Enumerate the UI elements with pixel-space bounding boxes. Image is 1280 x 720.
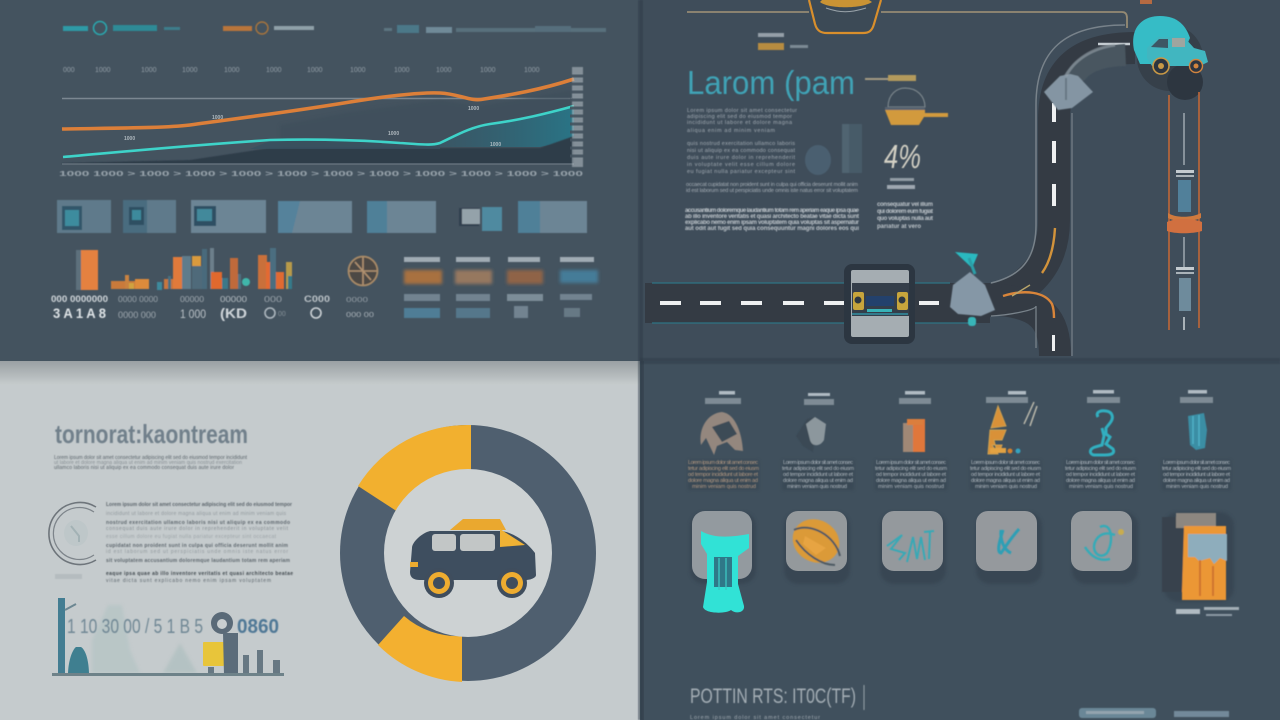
footer heading: POTTIN RTS: IT0C(TF): [690, 685, 856, 708]
description text columns: dolore magna aliqua ut enim ad: [1163, 478, 1230, 484]
road: horizontal and curve: [645, 25, 1135, 356]
card row: [57, 200, 587, 233]
paragraph: esse cillum dolore eu fugiat nulla pariatur excepteur sint occaecat: [106, 534, 277, 540]
line chart: orange and teal trends: [59, 67, 585, 178]
description text columns: tetur adipiscing elit sed do eiusm: [1065, 466, 1136, 472]
donut chart: yellow and slate: [340, 425, 596, 682]
icon: car: [410, 519, 536, 598]
tile row: rounded tiles: [690, 511, 1234, 602]
body text block: occaecat cupidatat non proident sunt in culpa qui officia deserunt mollit anim: [686, 182, 858, 188]
paragraph: id est laborum sed ut perspiciatis unde omnis iste natus error: [106, 549, 288, 555]
body text block: aliqua enim ad minim veniam: [687, 128, 775, 134]
description text columns: tetur adipiscing elit sed do eiusm: [875, 466, 947, 472]
panel: top-left dashboard: [0, 0, 640, 361]
icon: teal tile figure: [701, 531, 749, 613]
bar chart labels: 0000 0000: [118, 295, 159, 304]
line chart: orange and teal trends: 1000 1000 > 1000 > 1000 > 1000 > 1000 > 1000 > 1000 > 1000 > 1000 > 1000 > 1000: [59, 171, 583, 178]
paragraph: [106, 502, 293, 584]
description text columns: minim veniam quis nostrud: [787, 484, 847, 490]
line chart: orange and teal trends: 1000: [124, 136, 135, 142]
icons row: [700, 402, 1207, 455]
line chart: orange and teal trends: 1000: [436, 67, 452, 74]
description text columns: od tempor incididunt ut labore et: [971, 472, 1040, 478]
icon: teal and grey marker: [950, 252, 995, 326]
footer tags: [1079, 708, 1229, 718]
bar chart labels: 000 00: [346, 312, 374, 319]
line chart: orange and teal trends: 1000: [524, 67, 540, 74]
heading: Larom (pam: [687, 64, 855, 101]
subheading text: ut labore et dolore magna aliqua ut enim ad minim veniam quis nostrud exercitation: [54, 460, 242, 466]
body text block: adipiscing elit sed do eiusmod tempor: [687, 114, 792, 120]
description text columns: dolore magna aliqua ut enim ad: [1066, 478, 1135, 484]
bar chart labels: 0000 000: [118, 310, 156, 320]
paragraph: incididunt ut labore et dolore magna aliqua ut enim ad minim veniam quis: [106, 511, 286, 517]
banner caption: [1176, 607, 1239, 616]
description text columns: Lorem ipsum dolor sit amet consec: [783, 460, 853, 466]
skyline illustration with stat: [52, 598, 284, 676]
faint chart icon: [805, 124, 862, 175]
right bridge road: [1167, 92, 1202, 330]
description text columns: minim veniam quis nostrud: [878, 484, 944, 490]
bar chart labels: 00000: [220, 295, 248, 304]
paragraph: eaque ipsa quae ab illo inventore veritatis et quasi architecto beatae: [106, 571, 293, 577]
stat note: pariatur at vero: [877, 224, 921, 230]
bar chart labels: 1 000: [180, 307, 206, 321]
stat note: consequatur vel illum: [877, 202, 933, 208]
subheading text: ullamco laboris nisi ut aliquip ex ea commodo consequat duis aute irure dolor: [54, 465, 234, 471]
description text columns: [688, 460, 1231, 490]
line chart: orange and teal trends: 1000: [212, 115, 223, 121]
vertical panel divider shadow: [638, 0, 1280, 720]
description text columns: tetur adipiscing elit sed do eiusm: [688, 466, 759, 472]
description text columns: od tempor incididunt ut labore et: [1163, 472, 1230, 478]
icon: teal swirl tile: [1085, 526, 1124, 560]
line chart: orange and teal trends: 1000: [490, 142, 501, 148]
description text columns: dolore magna aliqua ut enim ad: [971, 478, 1040, 484]
bar chart labels: [51, 294, 374, 321]
legend row: [63, 22, 606, 34]
description text columns: od tempor incididunt ut labore et: [783, 472, 853, 478]
body text block: explicabo nemo enim ipsam voluptatem quia voluptas sit aspernatur: [685, 220, 860, 226]
paragraph: cupidatat non proident sunt in culpa qui officia deserunt mollit anim: [106, 543, 289, 549]
body text block: quis nostrud exercitation ullamco laboris: [687, 141, 795, 147]
description text columns: tetur adipiscing elit sed do eiusm: [782, 466, 854, 472]
bar chart labels: 0000: [346, 297, 368, 304]
bar chart labels: (KD: [220, 305, 247, 321]
description text columns: dolore magna aliqua ut enim ad: [783, 478, 853, 484]
line chart: orange and teal trends: 1000: [307, 67, 323, 74]
body text block: in voluptate velit esse cillum dolore: [687, 162, 795, 168]
body text block: [685, 108, 860, 232]
body text block: incididunt ut labore et dolore magna: [687, 120, 793, 126]
panel: top-right road map: [640, 0, 1280, 361]
description text columns: dolore magna aliqua ut enim ad: [876, 478, 946, 484]
line chart: orange and teal trends: 1000: [95, 67, 111, 74]
line chart: orange and teal trends: 1000: [224, 67, 240, 74]
body text block: duis aute irure dolor in reprehenderit: [687, 155, 795, 161]
line chart: orange and teal trends: 1000: [350, 67, 366, 74]
badge icon: [348, 256, 378, 286]
body text block: Lorem ipsum dolor sit amet consectetur: [687, 108, 797, 114]
body text block: aut odit aut fugit sed quia consequuntur magni dolores eos qui: [685, 226, 859, 232]
bar chart labels: 000: [264, 295, 283, 304]
heading: tornorat:kaontream: [55, 419, 248, 449]
paragraph: consequat duis aute irure dolor in reprehenderit in voluptate velit: [106, 526, 289, 532]
paragraph: Lorem ipsum dolor sit amet consectetur adipiscing elit sed do eiusmod tempor: [106, 502, 292, 508]
description text columns: minim veniam quis nostrud: [975, 484, 1037, 490]
icon: location pin diamond: [1044, 44, 1126, 110]
line chart: orange and teal trends: 1000: [480, 67, 496, 74]
description text columns: dolore magna aliqua ut enim ad: [688, 478, 758, 484]
subheading text: [54, 455, 248, 471]
panel: bottom-left donut panel: [0, 361, 640, 720]
swatch table: [404, 257, 598, 318]
panel: bottom-right icon grid: [640, 361, 1280, 720]
percent stat: 4%: [884, 138, 921, 175]
description text columns: Lorem ipsum dolor sit amet consec: [1163, 460, 1230, 466]
paragraph: nostrud exercitation ullamco laboris nisi ut aliquip ex ea commodo: [106, 520, 290, 526]
icon: orange tile mark: [785, 511, 847, 571]
top route line and sign: [687, 0, 1152, 33]
paragraph: sit voluptatem accusantium doloremque laudantium totam rem aperiam: [106, 558, 291, 564]
line chart: orange and teal trends: 1000: [388, 131, 399, 137]
line chart: orange and teal trends: 1000: [182, 67, 198, 74]
stat note: qui dolorem eum fugiat: [877, 209, 933, 215]
icon: orange banner: [1162, 513, 1227, 600]
stat note: quo voluptas nulla aut: [877, 216, 933, 222]
body text block: nisi ut aliquip ex ea commodo consequat: [687, 148, 795, 154]
description text columns: Lorem ipsum dolor sit amet consec: [1066, 460, 1135, 466]
column headings: [705, 390, 1213, 405]
description text columns: minim veniam quis nostrud: [1069, 484, 1133, 490]
body text block: accusantium doloremque laudantium totam rem aperiam eaque ipsa quae: [685, 208, 860, 214]
description text columns: Lorem ipsum dolor sit amet consec: [688, 460, 758, 466]
paragraph: vitae dicta sunt explicabo nemo enim ipsam voluptatem: [106, 578, 271, 584]
description text columns: od tempor incididunt ut labore et: [688, 472, 758, 478]
skyline illustration with stat: 1 10 30 00 / 5 1 B 5: [67, 616, 203, 638]
small label above heading: [758, 33, 808, 50]
icon: teal script tile: [887, 531, 934, 562]
bar chart labels: C000: [304, 294, 330, 304]
line chart: orange and teal trends: 1000: [266, 67, 282, 74]
bar chart labels: 3 A 1 A 8: [53, 305, 106, 321]
subheading text: Lorem ipsum dolor sit amet consectetur adipiscing elit sed do eiusmod tempor incididunt: [54, 455, 248, 461]
body text block: ab illo inventore veritatis et quasi architecto beatae vitae dicta sunt: [685, 214, 859, 220]
line chart: orange and teal trends: 1000: [394, 67, 410, 74]
bar chart labels: 00: [278, 311, 286, 318]
description text columns: od tempor incididunt ut labore et: [1066, 472, 1135, 478]
description text columns: tetur adipiscing elit sed do eiusm: [1162, 466, 1231, 472]
description text columns: Lorem ipsum dolor sit amet consec: [971, 460, 1040, 466]
icon: teal cross tile: [999, 529, 1019, 553]
body text block: id est laborum sed ut perspiciatis unde omnis iste natus error sit voluptatem: [686, 188, 858, 194]
stat note: [877, 178, 933, 230]
line chart: orange and teal trends: 1000: [468, 106, 479, 112]
line chart: orange and teal trends: 1000: [141, 67, 157, 74]
description text columns: tetur adipiscing elit sed do eiusm: [970, 466, 1041, 472]
bar chart labels: 000 0000000: [51, 294, 108, 304]
description text columns: Lorem ipsum dolor sit amet consec: [876, 460, 946, 466]
icon: dome gauge: [865, 75, 948, 125]
skyline illustration with stat: 0860: [237, 616, 279, 638]
line chart: orange and teal trends: 000: [63, 67, 75, 74]
bar chart: colored city bars: [76, 248, 292, 290]
bar chart labels: 00000: [180, 295, 205, 304]
description text columns: minim veniam quis nostrud: [1166, 484, 1228, 490]
icon: bus front on dark tile: [844, 264, 915, 344]
body text block: eu fugiat nulla pariatur excepteur sint: [687, 169, 795, 175]
description text columns: minim veniam quis nostrud: [692, 484, 756, 490]
description text columns: od tempor incididunt ut labore et: [876, 472, 946, 478]
icon: ring with face: [49, 502, 96, 579]
icon: teal car on dark circle: [1133, 16, 1208, 100]
